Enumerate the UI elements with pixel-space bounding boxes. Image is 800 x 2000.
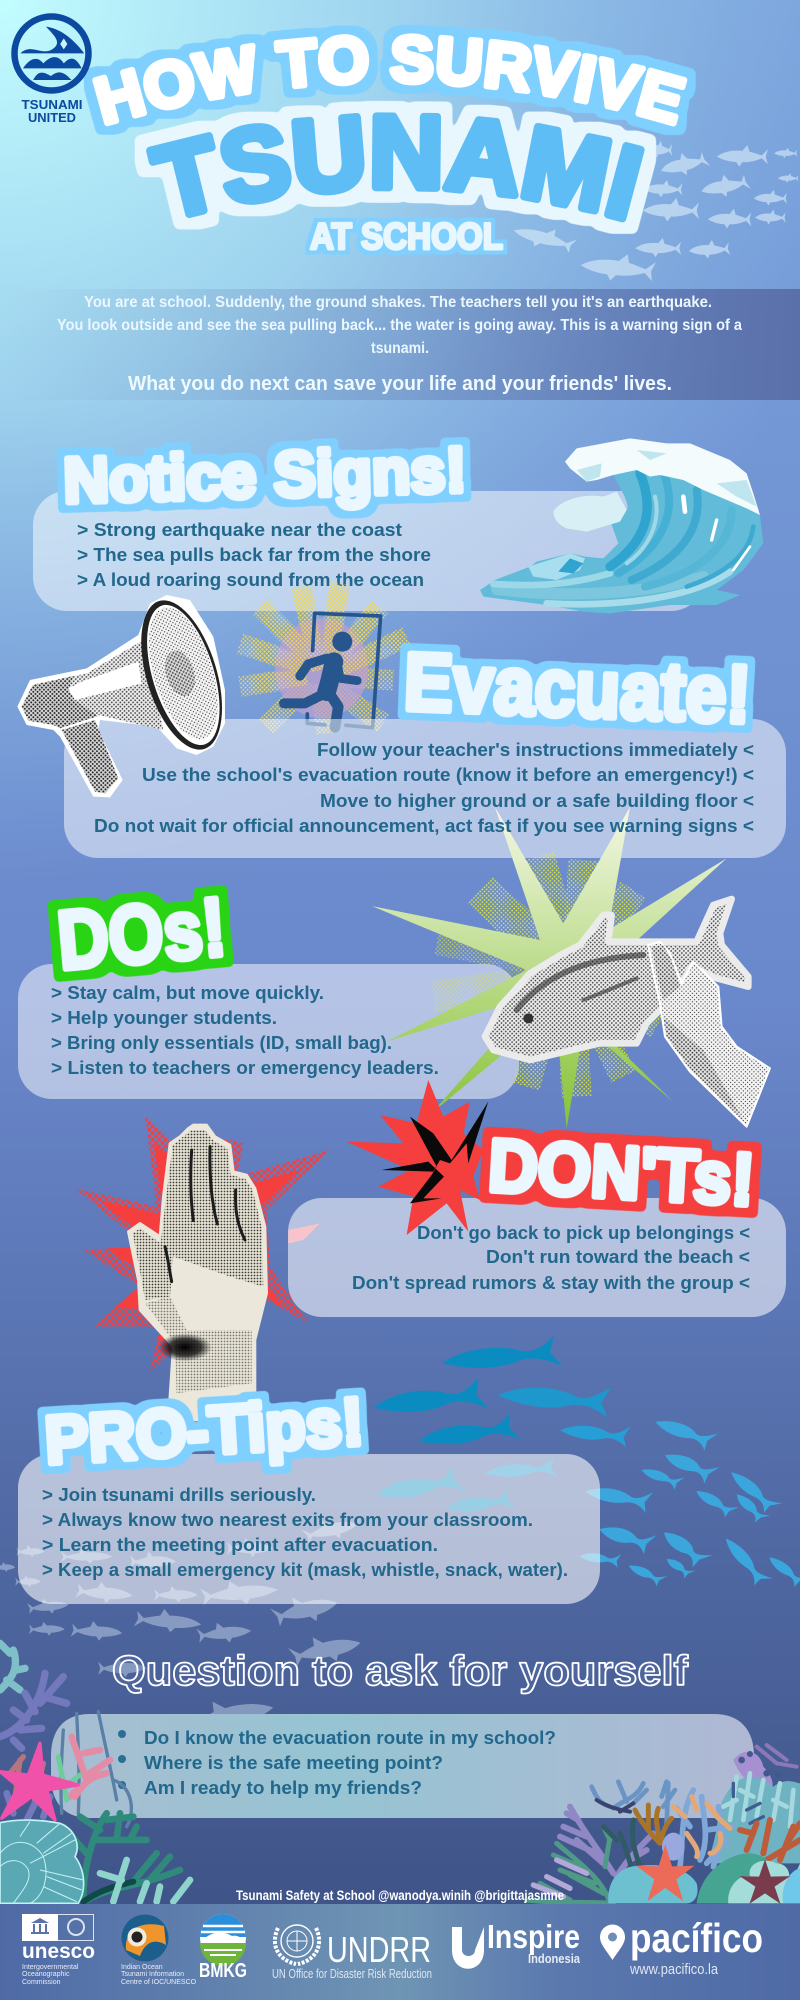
do's list: > Listen to teachers or emergency leaders. [51,1058,439,1078]
intro band: What you do next can save your life and your friends' lives. [128,373,672,395]
logo: unesco [22,1914,95,1986]
panel: notice signs [33,491,705,611]
panel: pro tips: > Always know two nearest exits from your classroom. [42,1510,533,1530]
logo: unesco: Intergovernmental [22,1964,79,1971]
illustration: red burst with hand [75,1115,330,1420]
burst behind evacuation icon [240,583,407,733]
logo: pacifico: www.pacifico.la [629,1961,719,1978]
panel: evacuate background [64,719,786,858]
evacuate list: Use the school's evacuation route (know it before an emergency!) < [142,765,754,785]
do's list: > Bring only essentials (ID, small bag). [51,1033,392,1053]
don'ts list: Don't spread rumors & stay with the group < [352,1273,750,1293]
heading: notice signs: Notice Signs! [63,433,467,517]
panel: questions: Where is the safe meeting point? [144,1753,443,1773]
logo: pacifico: pacífico [630,1915,763,1961]
logo: UNDRR: UN Office for Disaster Risk Reduction [272,1966,432,1981]
footer band [0,1904,800,2000]
do's list: > Stay calm, but move quickly. [51,983,324,1003]
panel: questions: Do I know the evacuation route in my school? [144,1728,556,1748]
illustration: megaphone [17,591,238,797]
logo: Inspire Indonesia: Inspire [487,1918,580,1955]
panel: questions: Am I ready to help my friends? [144,1778,422,1798]
logo: Tsunami United: TSUNAMI [22,97,82,112]
do's list [51,983,439,1078]
panel: pro tips [18,1454,600,1604]
illustration: right coral [527,1745,800,1904]
evacuate list [94,740,754,836]
fish school: blue fish [369,1336,800,1587]
explosion burst near don'ts [288,1080,488,1243]
do's list: > Help younger students. [51,1008,277,1028]
panel: questions [51,1714,754,1818]
panel: notice signs: > The sea pulls back far from the shore [77,545,431,565]
logo: Indian Ocean Tsunami Information Centre: Indian Ocean [121,1964,163,1971]
don'ts list [352,1223,750,1293]
intro band: tsunami. [371,340,429,357]
illustration: left coral [0,1643,190,1903]
panel: pro tips: > Keep a small emergency kit (mask, whistle, snack, water). [42,1560,568,1580]
logo: Tsunami United [14,16,88,125]
fish school: top right tuna silhouettes [508,141,798,284]
logo: UNDRR [272,1925,432,1981]
intro band [0,289,800,400]
logo: Tsunami United: UNITED [28,110,76,125]
heading: pro tips: PRO-Tips! [43,1383,366,1479]
panel: notice signs: > A loud roaring sound from the ocean [77,570,424,590]
title: Tsunami: TSUNAMI [134,100,656,234]
evacuate list: Move to higher ground or a safe building floor < [320,791,754,811]
logo: Inspire Indonesia: Indonesia [528,1951,581,1966]
panel: notice signs: > Strong earthquake near the coast [77,520,402,540]
logo: UNDRR: UNDRR [327,1929,431,1970]
fish school: lower tuna silhouettes [0,1513,367,1740]
logo: Indian Ocean Tsunami Information Centre [121,1914,197,1986]
panel: pro tips: > Join tsunami drills seriously. [42,1485,316,1505]
illustration: green starburst with fish and hand [372,807,770,1128]
icon: person running out of door [284,613,381,728]
logo: Indian Ocean Tsunami Information Centre: Centre of IOC/UNESCO [121,1979,197,1986]
heading: do's: DOs! [54,880,229,987]
logo: BMKG [199,1914,247,1982]
title: How to survive: HOW TO SURVIVE [84,24,696,135]
heading: don'ts: DON'Ts! [486,1124,757,1221]
title: at school: AT SCHOOL [310,216,503,257]
panel: pro tips: > Learn the meeting point after evacuation. [42,1535,438,1555]
heading: evacuate: Evacuate! [402,636,753,741]
logo: BMKG: BMKG [199,1960,247,1982]
evacuate list: Follow your teacher's instructions immediately < [317,740,754,760]
logo: Inspire Indonesia [452,1918,581,1969]
logo: Indian Ocean Tsunami Information Centre: Tsunami Information [121,1971,184,1978]
evacuate list: Do not wait for official announcement, act fast if you see warning signs < [94,816,754,836]
panel: do's background [18,964,519,1099]
logo: unesco: unesco [22,1940,95,1963]
illustration: wave [480,438,763,613]
intro band: You are at school. Suddenly, the ground shakes. The teachers tell you it's an earthquake. [84,294,712,311]
logo: unesco: Commission [22,1979,61,1986]
don'ts list: Don't run toward the beach < [486,1247,750,1267]
credit line: Tsunami Safety at School @wanodya.winih @brigittajasmne [236,1888,564,1903]
logo: unesco: Oceanographic [22,1971,70,1978]
panel: don'ts background [288,1198,786,1317]
logo: pacifico [600,1915,763,1978]
heading: question to ask for yourself: Question to ask for yourself [112,1647,689,1694]
don'ts list: Don't go back to pick up belongings < [417,1223,750,1243]
intro band: You look outside and see the sea pulling back... the water is going away. This is a warning sign of a [57,317,742,334]
